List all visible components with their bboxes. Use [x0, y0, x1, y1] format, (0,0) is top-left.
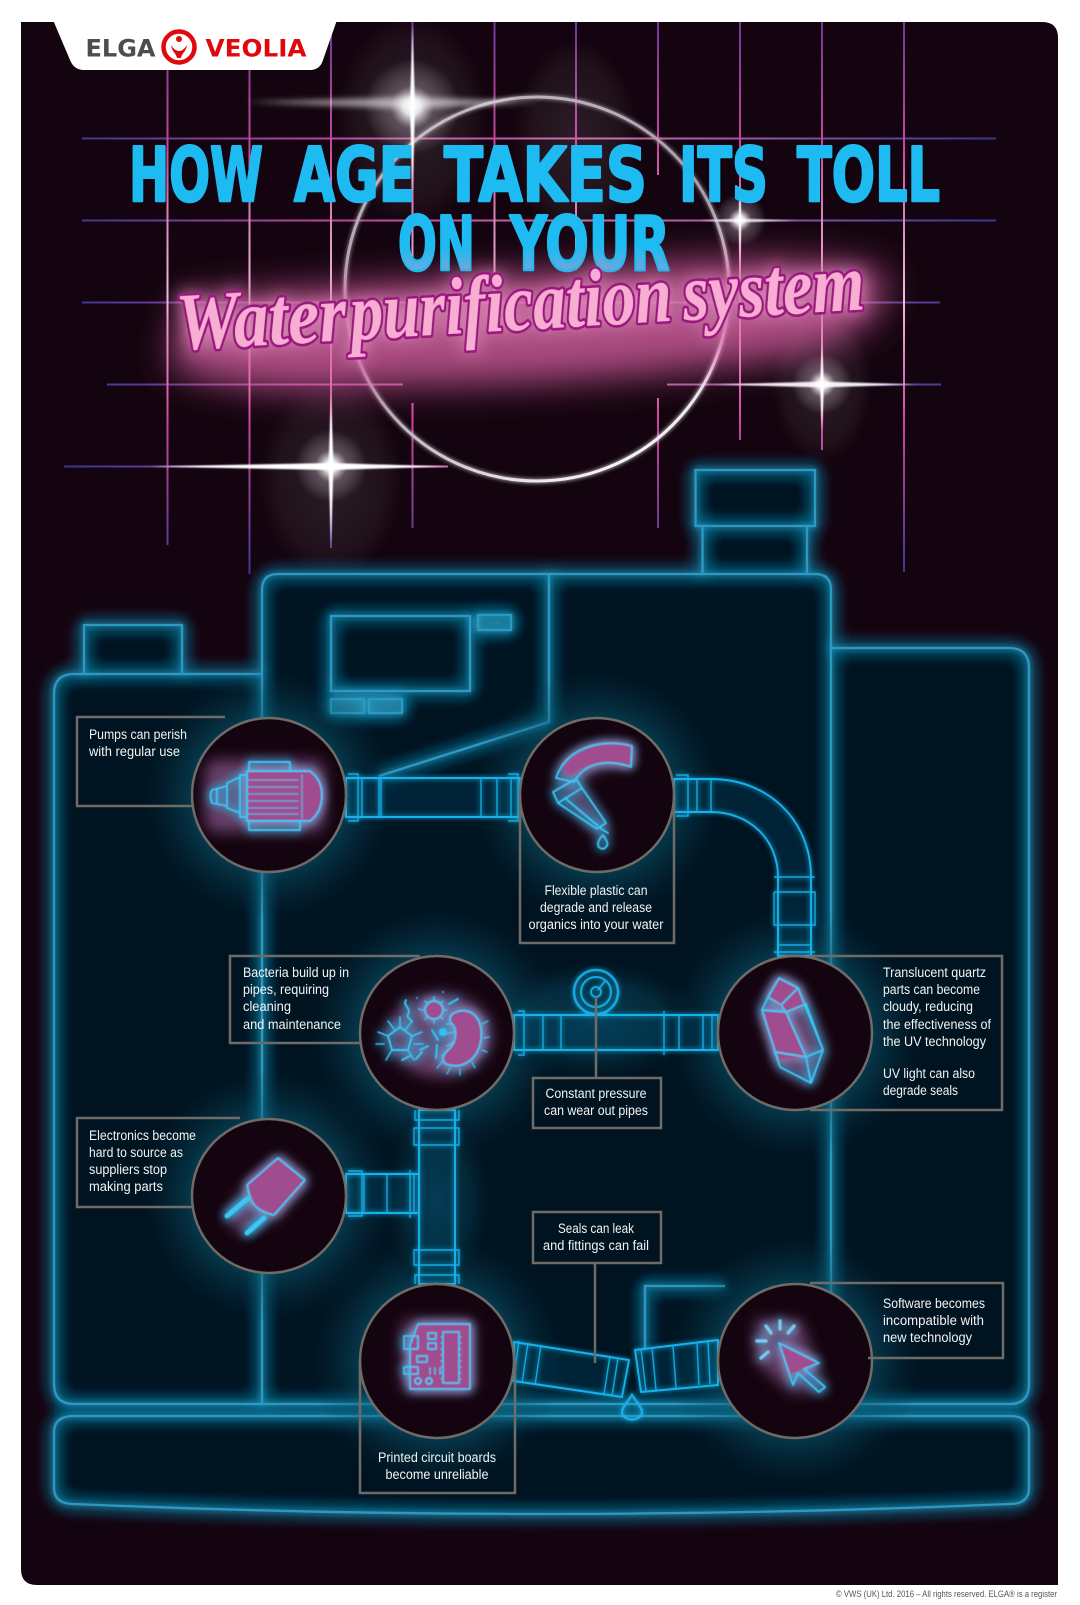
callout: bacteria: and maintenance: [243, 1017, 341, 1032]
callout: quartz: [810, 956, 1002, 1110]
script subtitle: system: [679, 236, 867, 338]
logo tab: [53, 20, 337, 70]
machine outline: [54, 470, 1029, 1514]
callout: seals: [533, 1212, 661, 1363]
control buttons: [331, 615, 511, 713]
icon: pressure gauge: [574, 970, 618, 1015]
title: YOUR: [509, 200, 670, 288]
icon halo: quartz crystal: [759, 975, 826, 1086]
title: HOW: [129, 131, 263, 219]
pipe: pressure line: [514, 1011, 718, 1055]
title: AGE: [294, 131, 415, 219]
neon grid background: [64, 22, 996, 574]
icon halo: pump: [205, 760, 325, 832]
callout: electronics: making parts: [89, 1179, 163, 1194]
callout: flexible plastic: [520, 795, 674, 943]
callout: bacteria: cleaning: [243, 999, 291, 1014]
callout: electronics: suppliers stop: [89, 1162, 167, 1177]
callout: software: [810, 1283, 1003, 1358]
circle: pump: [192, 718, 346, 872]
icon: cursor click: [757, 1321, 825, 1392]
icon: leaking drop: [622, 1395, 642, 1420]
script subtitle: purification: [343, 248, 674, 358]
pipe: broken left: [513, 1341, 629, 1397]
callout: pumps: with regular use: [88, 744, 180, 759]
callout: quartz: Translucent quartz: [883, 965, 986, 980]
callout: software: Software becomes: [883, 1296, 985, 1311]
starbursts: [150, 15, 915, 580]
icon: electronic component: [227, 1158, 305, 1233]
circle: bacteria: [360, 956, 514, 1110]
callout: constant pressure: can wear out pipes: [544, 1103, 648, 1118]
callout: electronics: [77, 1118, 240, 1207]
callout: quartz: degrade seals: [883, 1083, 958, 1098]
callout: electronics: hard to source as: [89, 1145, 183, 1160]
circle: software: [718, 1284, 872, 1438]
script subtitle: [174, 236, 867, 368]
callout: quartz: the effectiveness of: [883, 1017, 991, 1032]
callout: pumps: [77, 717, 225, 806]
pipe: elbow: [674, 775, 815, 956]
logo: VEOLIA wordmark: VEOLIA: [206, 34, 307, 62]
title: TAKES: [444, 131, 647, 219]
control screen: [331, 616, 470, 691]
pipe: broken right: [635, 1340, 718, 1392]
callout: circuit boards: Printed circuit boards: [378, 1450, 496, 1465]
icon halo: electronic component: [225, 1155, 308, 1235]
callout: software: new technology: [883, 1330, 972, 1345]
callout: quartz: parts can become: [883, 982, 980, 997]
central unit: [262, 574, 831, 1404]
callout: flexible plastic: degrade and release: [540, 900, 652, 915]
icon: plastic tube: [553, 743, 632, 849]
icon: quartz crystal: [762, 978, 823, 1083]
logo: ELGA wordmark: ELGA: [86, 34, 156, 62]
circle: printed circuit board: [360, 1284, 514, 1438]
script subtitle: Water: [174, 267, 350, 368]
callout: electronics: Electronics become: [89, 1128, 196, 1143]
icon halo: bacteria: [388, 993, 492, 1077]
icon: bacteria cluster: [376, 992, 489, 1075]
lower right inset: [645, 1286, 725, 1350]
callout: constant pressure: Constant pressure: [546, 1086, 646, 1101]
callout: flexible plastic: Flexible plastic can: [544, 883, 648, 898]
callout: quartz: cloudy, reducing: [883, 999, 973, 1014]
left tank: [54, 648, 1029, 1404]
icon halo: cursor: [755, 1320, 826, 1392]
logo: emblem: [164, 32, 194, 62]
pipe: electronics branch: [346, 1170, 419, 1218]
callout: circuit boards: [360, 1361, 515, 1493]
front divider: [379, 574, 549, 776]
pipe: vertical lower: [414, 1110, 459, 1284]
callout: pumps: Pumps can perish: [89, 727, 187, 742]
circle: electronics: [192, 1119, 346, 1273]
pipes: [346, 774, 815, 1420]
callout: seals: and fittings can fail: [543, 1238, 649, 1253]
title: ON: [398, 200, 475, 288]
circle: flexible plastic: [520, 718, 674, 872]
callout: software: incompatible with: [883, 1313, 984, 1328]
callout: quartz: the UV technology: [883, 1034, 986, 1049]
pipe: pump to plastic: [346, 774, 520, 821]
icon: pump: [210, 762, 322, 830]
decorative ring: [345, 97, 729, 481]
callout: constant pressure: [533, 997, 661, 1128]
callout: seals: Seals can leak: [558, 1221, 634, 1236]
circle: quartz: [718, 956, 872, 1110]
top cap: [696, 470, 815, 574]
teal glows behind circles: [141, 667, 923, 1489]
callout: bacteria: pipes, requiring: [243, 982, 329, 997]
title: [129, 131, 940, 288]
left cap: [84, 625, 182, 674]
callout: quartz: UV light can also: [883, 1066, 975, 1081]
base: [54, 1416, 1029, 1514]
callout: bacteria: [230, 956, 420, 1043]
callout: flexible plastic: organics into your water: [528, 917, 664, 932]
icon halo: circuit board: [402, 1320, 474, 1392]
icon halo: plastic tube: [556, 745, 632, 838]
title: ITS: [679, 131, 768, 219]
icon: circuit board: [404, 1324, 470, 1389]
callout: circuit boards: become unreliable: [386, 1467, 488, 1482]
script title glow: [170, 260, 885, 390]
title: TOLL: [797, 131, 940, 219]
callout: bacteria: Bacteria build up in: [243, 965, 349, 980]
